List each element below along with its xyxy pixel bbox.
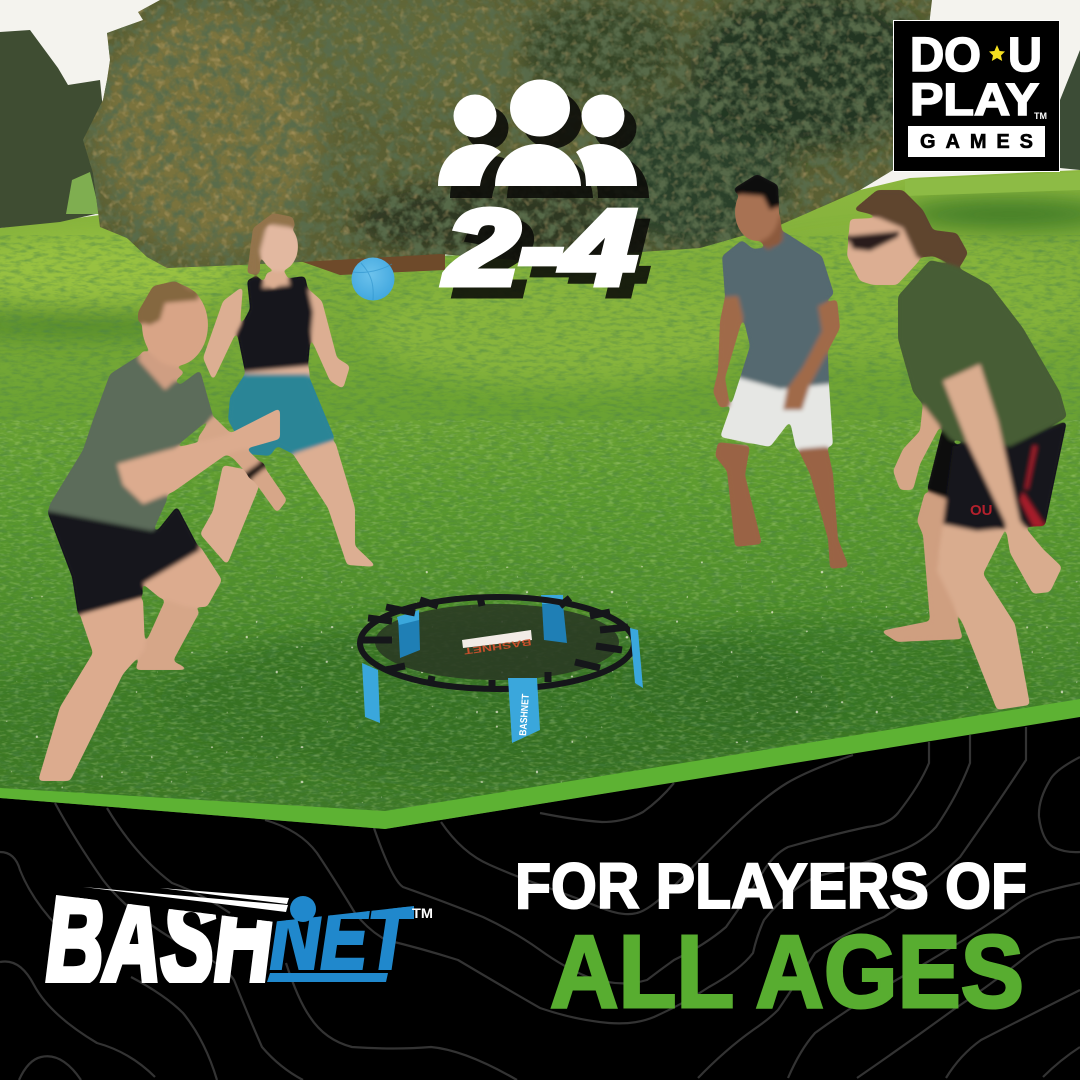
face bbox=[847, 217, 920, 285]
green chevron band bbox=[0, 699, 1080, 829]
distant right tree bbox=[1060, 50, 1080, 170]
back shorts bbox=[927, 430, 957, 499]
shorts bbox=[720, 378, 833, 449]
front legs bbox=[508, 678, 540, 743]
hair bbox=[853, 190, 968, 267]
front leg bbox=[937, 524, 1030, 710]
person: woman in black top bbox=[200, 213, 377, 567]
person: man in green shirt with sunglasses bbox=[847, 190, 1067, 710]
head bbox=[755, 215, 783, 250]
icon shadow bbox=[450, 92, 649, 198]
soil under pine bbox=[300, 250, 445, 275]
for players of: FOR PLAYERS OF bbox=[515, 850, 1027, 922]
people icon bbox=[438, 80, 637, 186]
BASH wordmark: BASH bbox=[46, 872, 274, 1010]
hair bbox=[733, 174, 779, 210]
logo box bbox=[894, 20, 1060, 172]
netting bbox=[375, 604, 619, 680]
shirt bbox=[722, 231, 834, 389]
player count icon and number bbox=[438, 80, 649, 318]
headline: for players of all ages bbox=[515, 850, 1027, 1029]
NET wordmark: NET bbox=[270, 888, 415, 990]
DO: DO bbox=[910, 29, 981, 82]
midriff bbox=[245, 364, 310, 376]
net logo bbox=[462, 630, 532, 656]
hair bbox=[138, 281, 198, 325]
spike net bbox=[360, 595, 643, 743]
logo: Do U Play Games bbox=[894, 20, 1060, 172]
speed streaks bbox=[83, 887, 288, 912]
far sunlit lawn strip bbox=[905, 172, 1080, 196]
light bush bbox=[66, 172, 100, 214]
person: man in grey shirt and white shorts bbox=[713, 174, 849, 569]
shorts bbox=[943, 421, 1067, 531]
contour lines bbox=[0, 727, 1080, 1080]
games box bbox=[908, 126, 1045, 157]
back arm bbox=[197, 416, 287, 513]
legs bbox=[135, 596, 200, 670]
head bbox=[138, 350, 185, 390]
back arm bbox=[893, 403, 940, 490]
logo: BashNet bbox=[45, 887, 432, 983]
shorts bbox=[47, 506, 200, 615]
photo: park background bbox=[0, 0, 1080, 835]
rim bbox=[360, 597, 634, 689]
shorts emblem: OU bbox=[970, 502, 992, 519]
shirt bbox=[48, 355, 213, 531]
legs bbox=[715, 442, 762, 547]
blue ball bbox=[290, 896, 316, 922]
front arm bbox=[943, 364, 1062, 594]
lawn bbox=[0, 170, 1080, 830]
arms and legs bbox=[203, 286, 243, 381]
back legs bbox=[398, 611, 420, 658]
main pine tree bbox=[83, 0, 932, 268]
shirt bbox=[898, 260, 1067, 446]
strap logo: BASHNET bbox=[518, 694, 532, 736]
trademark: TM bbox=[412, 905, 433, 921]
net logo: BASHNET bbox=[463, 637, 532, 656]
front arm bbox=[117, 408, 280, 504]
grass texture bbox=[0, 235, 1080, 835]
sunglasses bbox=[847, 231, 900, 251]
person: man in olive shirt crouching bbox=[38, 281, 287, 781]
top bbox=[237, 276, 313, 372]
PLAY: PLAY bbox=[910, 74, 1039, 125]
shorts red panel bbox=[1020, 492, 1045, 526]
arms bbox=[713, 296, 743, 408]
U: U bbox=[1008, 29, 1042, 82]
star bbox=[989, 45, 1005, 61]
GAMES: GAMES bbox=[920, 131, 1033, 153]
ball bbox=[352, 258, 394, 300]
number: 2-4 bbox=[444, 189, 636, 307]
bottom black panel bbox=[0, 716, 1080, 1080]
head and hair bbox=[262, 272, 290, 288]
all ages: ALL AGES bbox=[550, 914, 1024, 1029]
shorts bbox=[228, 374, 335, 456]
left tree bbox=[0, 30, 103, 228]
back leg bbox=[880, 492, 963, 642]
number shadow: 2-4 bbox=[456, 200, 648, 318]
watch bbox=[246, 461, 266, 480]
rim spokes bbox=[362, 597, 628, 689]
trademark: TM bbox=[1034, 111, 1047, 121]
underline bbox=[267, 973, 388, 982]
lawn light patches bbox=[0, 198, 1080, 780]
